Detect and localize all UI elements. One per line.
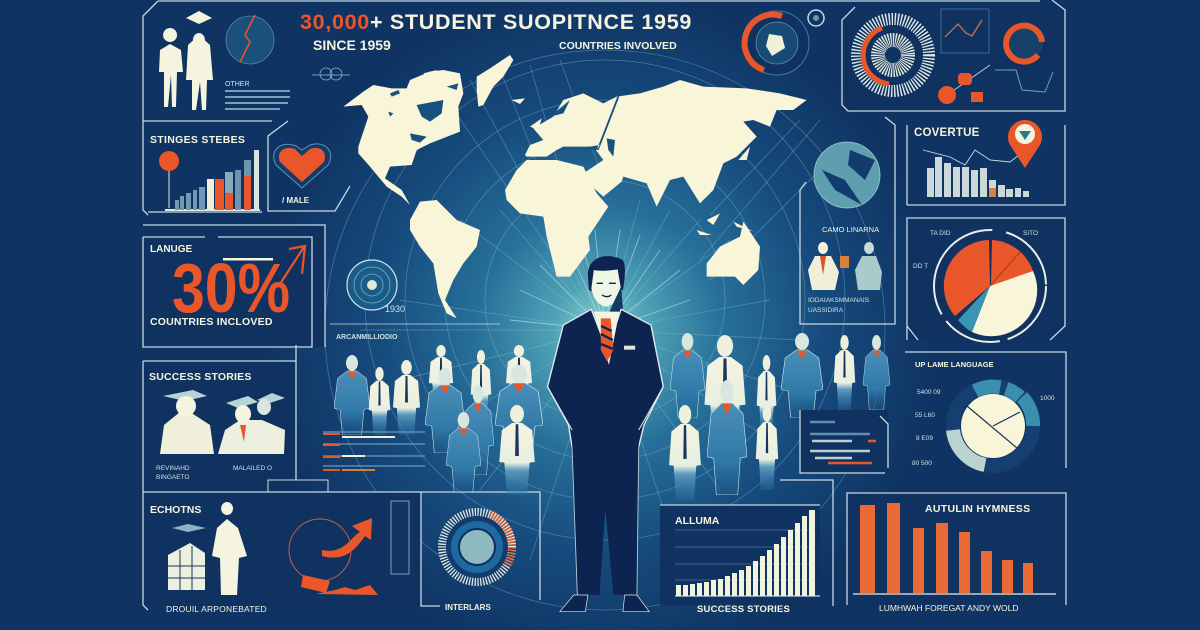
panel: donut chart: 5400 09 <box>917 389 941 396</box>
icon: round medallion <box>347 260 405 314</box>
map meridian and seas <box>550 97 619 157</box>
caption: COUNTRIES INCLOVED <box>150 316 273 328</box>
chart: trend <box>995 70 1053 92</box>
chart: orange donut <box>1005 24 1043 62</box>
hair and head <box>588 256 625 292</box>
bar chart <box>927 157 1029 197</box>
arrow <box>278 246 305 287</box>
panel: pie chart: SITO <box>1023 230 1038 237</box>
title <box>300 10 692 53</box>
panel: donut chart: 1000 <box>1040 395 1055 402</box>
icon: globe <box>814 142 880 208</box>
panel: growth arrow <box>268 480 409 595</box>
icon: graduate figure <box>186 11 213 110</box>
continent: South America <box>410 200 480 318</box>
icon: route globe <box>226 15 274 64</box>
person: crowd left <box>334 345 543 495</box>
panel: emotions <box>143 492 421 614</box>
caption left: REVINAHD <box>156 465 190 472</box>
label: other: OTHER <box>225 81 250 88</box>
islands <box>423 70 790 235</box>
heading: COVERTUE <box>914 127 980 139</box>
label: / MALE <box>282 196 310 205</box>
panel: stat bars right <box>800 410 888 473</box>
panel: alumni area chart <box>660 480 833 615</box>
map grid and rays <box>325 50 885 610</box>
trousers <box>572 442 639 595</box>
panel: coverage <box>907 120 1065 205</box>
side legend <box>391 501 409 574</box>
panel: donut chart <box>905 352 1066 468</box>
icon: staff right <box>840 242 882 290</box>
panel: donut chart: 8 E09 <box>916 435 933 442</box>
man in suit <box>547 256 663 612</box>
panel: top-right dashboard <box>842 0 1065 111</box>
continent: Africa <box>505 160 608 277</box>
caption left second line: BINGAETO <box>156 474 189 481</box>
caption second line: UASSIDIRA <box>808 307 844 314</box>
icon: graduate left <box>160 390 214 454</box>
Hudson Bay and lakes <box>388 83 458 143</box>
icons: connected badges <box>938 65 990 104</box>
subtitle: since: SINCE 1959 <box>313 37 391 53</box>
heading: SUCCESS STORIES <box>149 371 252 383</box>
world map <box>343 55 807 318</box>
continent: Australia <box>707 222 760 285</box>
icon: location pin <box>1008 120 1042 168</box>
caption right: MALAILED O <box>233 465 272 472</box>
panel: donut chart: 55 L60 <box>915 412 935 419</box>
jacket <box>547 309 663 447</box>
area sparkline <box>316 585 378 595</box>
panel: pie chart <box>907 218 1065 342</box>
stat lines <box>225 91 290 109</box>
icon: standing figure <box>159 28 183 107</box>
icon: heart <box>274 144 331 188</box>
heading: ECHOTNS <box>150 504 201 516</box>
label: archive: ARCANMILLIODIO <box>336 334 398 341</box>
stat bars: left <box>323 432 425 470</box>
title: 30,000+ STUDENT SUOPITNCE 1959 <box>300 10 692 34</box>
icon: seated graduate <box>168 524 206 590</box>
panel heading: STINGES STEBES <box>150 134 245 146</box>
icon: graduates right <box>218 393 285 454</box>
icon: orange badge <box>159 151 179 171</box>
central glow <box>140 0 1065 630</box>
panel: globe <box>800 117 895 324</box>
panel: orange bar chart <box>847 493 1066 613</box>
bars <box>676 510 815 596</box>
chart: pie <box>934 230 1046 342</box>
chart: donut <box>953 386 1033 466</box>
arrow <box>322 518 372 558</box>
orange tag <box>301 575 330 593</box>
shoes <box>560 595 649 612</box>
panel: 30 percent <box>143 225 325 347</box>
heading: ALLUMA <box>675 515 720 527</box>
caption lines: IODAIAKSMMANAIS <box>808 297 870 304</box>
caption: DROUIL ARPONEBATED <box>166 604 267 614</box>
heading: success stories: SUCCESS STORIES <box>697 604 790 615</box>
panel: donut chart: 80 500 <box>912 460 932 467</box>
panel: stinges chart <box>143 121 262 215</box>
pocket square <box>624 346 635 350</box>
icon: target circle top <box>745 10 824 75</box>
bar chart <box>165 150 260 211</box>
panel: heart <box>268 121 350 211</box>
caption: LUMHWAH FOREGAT ANDY WOLD <box>879 603 1018 613</box>
heading: AUTULIN HYMNESS <box>925 503 1030 515</box>
caption: CAMO LINARNA <box>822 225 879 234</box>
subtitle: countries: COUNTRIES INVOLVED <box>559 40 677 52</box>
continent: Greenland <box>477 55 513 107</box>
person: crowd right <box>669 333 890 500</box>
tie <box>601 318 613 362</box>
heading: UP LAME LANGUAGE <box>915 360 994 369</box>
big number: 30% <box>172 249 290 327</box>
bars <box>860 503 1033 593</box>
panel: success stories <box>143 345 296 492</box>
caption: INTERLARS <box>445 603 491 612</box>
icon: standing figure <box>212 502 247 595</box>
panel: interlars ring <box>421 492 540 612</box>
heading: LANUGE <box>150 244 193 255</box>
panel: pie chart: TA DID <box>930 230 951 237</box>
chart: ring <box>442 512 512 582</box>
decorative bar <box>223 258 273 260</box>
panel: top-left figures <box>143 1 1040 121</box>
icon: round medallion: 1930 <box>385 304 405 314</box>
icon: blueprint mark <box>312 68 350 80</box>
continent: North America <box>343 70 463 205</box>
icon: staff left <box>808 242 839 290</box>
continent: Eurasia <box>525 80 807 207</box>
chart: small line <box>941 9 989 53</box>
chart: sunburst <box>857 19 929 91</box>
panel: pie chart: DD T <box>913 263 928 270</box>
